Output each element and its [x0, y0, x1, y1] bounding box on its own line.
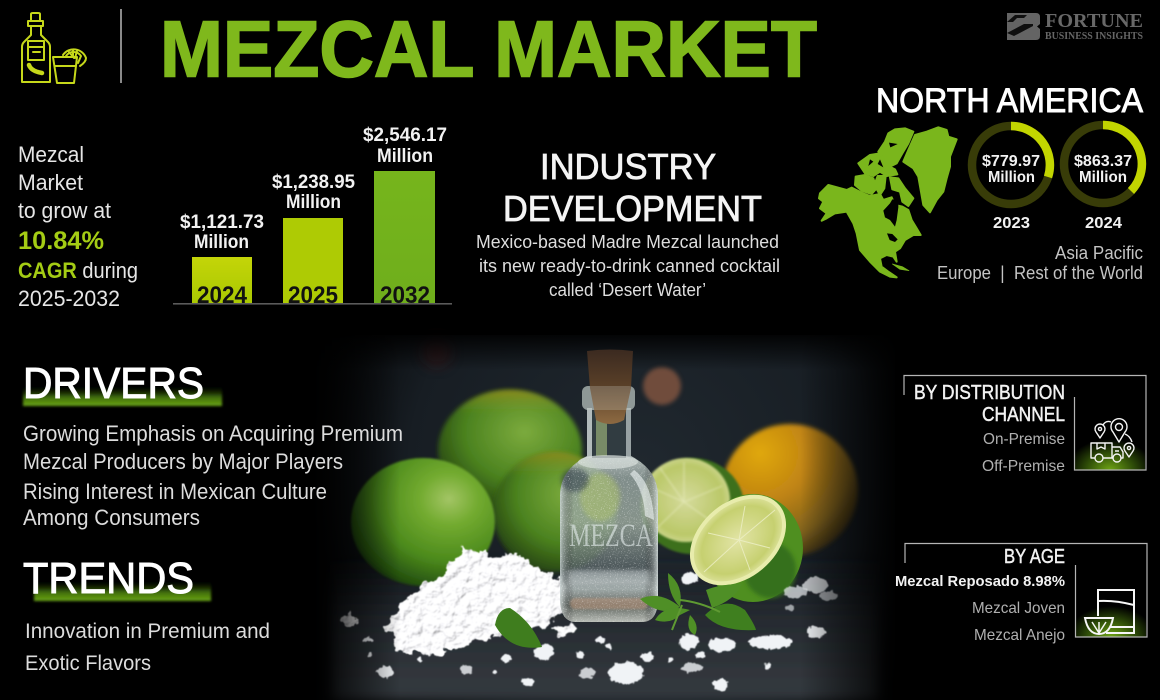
bar 2025: $1,238.95	[272, 172, 355, 193]
bar 2025: 2025	[288, 282, 338, 309]
industry development text: its new ready-to-drink canned cocktail	[479, 256, 780, 276]
industry development text: Mexico-based Madre Mezcal launched	[476, 232, 779, 252]
other regions: Asia Pacific	[1055, 243, 1143, 263]
glass bottle with cork	[560, 350, 658, 622]
CAGR text block: Market	[18, 170, 83, 195]
drivers text: Rising Interest in Mexican Culture	[23, 479, 327, 504]
panel: by distribution channel	[904, 376, 1146, 475]
industry development heading: DEVELOPMENT	[503, 188, 762, 229]
panel: by distribution channel: Off-Premise	[982, 458, 1065, 475]
bar 2024: Million	[194, 232, 249, 253]
trends text	[25, 620, 270, 675]
other regions: Europe | Rest of the World	[937, 263, 1143, 283]
logo: Fortune Business Insights	[1007, 10, 1143, 42]
bar 2032: $2,546.17	[363, 125, 447, 146]
panel: by age: Mezcal Joven	[972, 600, 1065, 617]
icon: delivery truck with location pins	[1091, 419, 1134, 462]
industry development heading: INDUSTRY	[540, 146, 716, 187]
hero photo: mezcal bottle with limes and salt	[310, 330, 900, 700]
donut 2023: $779.97	[982, 153, 1040, 170]
trends text: Exotic Flavors	[25, 652, 151, 675]
donut 2023: Million	[988, 169, 1035, 186]
panel: by distribution channel: On-Premise	[983, 431, 1065, 448]
donut 2023	[972, 126, 1050, 232]
bar 2024	[180, 212, 264, 309]
drivers text: Among Consumers	[23, 505, 200, 530]
logo: Fortune Business Insights: BUSINESS INSIGHTS	[1045, 31, 1143, 42]
industry development text	[476, 232, 780, 300]
panel: by age: Mezcal Reposado 8.98%	[895, 573, 1065, 590]
panel: by age: Mezcal Anejo	[974, 627, 1065, 644]
CAGR text block: 10.84%	[18, 227, 104, 255]
drivers text: Mezcal Producers by Major Players	[23, 449, 343, 474]
drivers text: Growing Emphasis on Acquiring Premium	[23, 421, 403, 446]
icon: glass with lime wedge	[1085, 590, 1134, 634]
etched bottle label: MEZCA	[569, 518, 653, 554]
bar 2032: Million	[377, 146, 433, 167]
other regions	[937, 243, 1143, 283]
donut 2024: $863.37	[1074, 153, 1132, 170]
panel: by distribution channel: BY DISTRIBUTION	[914, 382, 1065, 404]
logo: Fortune Business Insights: FORTUNE	[1045, 10, 1143, 32]
bar 2032	[363, 125, 447, 309]
trends text: Innovation in Premium and	[25, 620, 270, 643]
title: MEZCAL MARKET	[160, 4, 817, 94]
donut 2024: 2024	[1085, 215, 1122, 232]
CAGR text block: to grow at	[18, 198, 111, 223]
CAGR text block	[18, 142, 138, 311]
bar 2024: 2024	[197, 282, 248, 309]
heading: trends: TRENDS	[23, 554, 194, 603]
industry development heading	[503, 146, 762, 229]
CAGR text block: Mezcal	[18, 142, 84, 167]
drivers text	[23, 421, 403, 530]
donut 2023: 2023	[993, 215, 1030, 232]
heading: drivers: DRIVERS	[23, 359, 204, 408]
bar 2024: $1,121.73	[180, 212, 264, 233]
map: North America	[819, 127, 957, 277]
bar 2025: Million	[286, 192, 341, 213]
panel: by distribution channel: CHANNEL	[982, 404, 1065, 426]
region heading: NORTH AMERICA	[876, 82, 1143, 120]
bar 2032: 2032	[380, 282, 430, 309]
bar 2025	[272, 172, 355, 309]
divider	[120, 9, 122, 83]
panel: by age: BY AGE	[1004, 546, 1065, 568]
panel: by age	[895, 544, 1147, 644]
CAGR text block: 2025-2032	[18, 286, 120, 311]
icon: bottle and shot glass with lime	[22, 13, 86, 83]
donut 2024: Million	[1079, 169, 1127, 186]
CAGR text block: CAGR during	[18, 258, 138, 283]
bar chart: market size	[173, 125, 452, 309]
donut 2024	[1064, 125, 1142, 232]
industry development text: called ‘Desert Water’	[549, 280, 706, 300]
